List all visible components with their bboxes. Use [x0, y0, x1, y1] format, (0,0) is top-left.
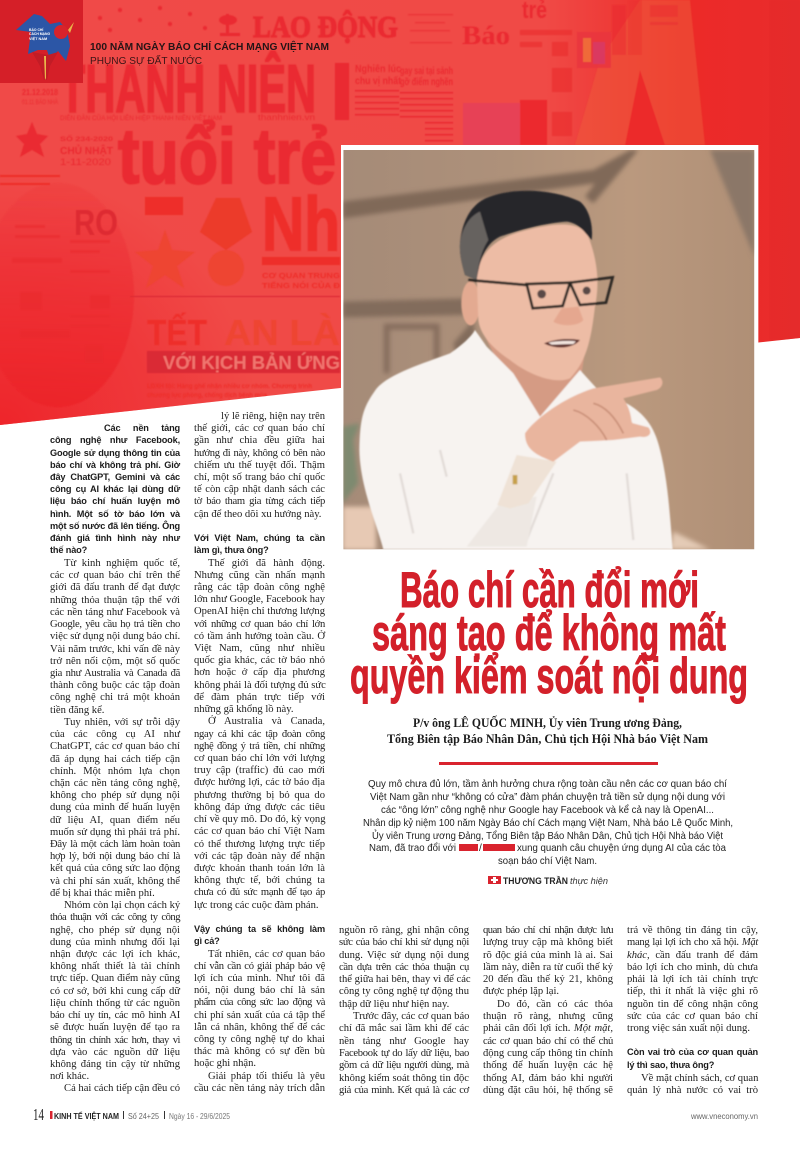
masthead fragments: LAO ĐỘNG: [253, 9, 398, 44]
text column 1: có cơ sở, bởi khi cung cấp dữ: [50, 986, 180, 997]
text column 2: Việt Nam, cũng như nhiều: [194, 643, 325, 654]
title: [350, 562, 748, 704]
text column 3: [339, 925, 471, 1096]
intro paragraph: soạn báo chí Việt Nam.: [498, 856, 597, 867]
masthead fragments: [16, 0, 678, 200]
text column 2: có tầm ảnh hưởng toàn cầu. Ở: [194, 631, 325, 642]
panel: red newspaper collage banner: LĐXH tội: Hàng ghế nhận nhiều cơ nhóm. Chương trình: [147, 383, 312, 390]
masthead fragments: DIỄN ĐÀN CỦA HỘI LIÊN HIỆP THANH NIÊN VIỆT NAM: [60, 113, 222, 122]
icon: 100 years press logo block: [0, 0, 83, 83]
text column 5: tiếp, thì ít nhất là việc ghi rõ: [627, 986, 758, 997]
text column 1: không cho phép sử dụng nội: [50, 790, 180, 801]
man: ear: [461, 281, 480, 325]
man: face: [477, 225, 597, 380]
text column 2: lợi ích của mình. Như tôi đã: [194, 973, 325, 984]
text column 1: không đáng tin cậy từ những: [50, 1059, 180, 1070]
masthead fragments: THANH NIÊN: [60, 50, 316, 127]
text column 2: Tất nhiên, các cơ quan báo: [208, 949, 325, 960]
text column 5: mang lại lợi ích cho xã hội. Mặt: [627, 937, 758, 948]
panel: red newspaper collage banner: Nh: [262, 182, 340, 267]
panel: red newspaper collage banner: RO: [74, 202, 118, 243]
panel: red newspaper collage banner: VỚI KỊCH BẢN ỨNG: [163, 352, 340, 373]
masthead fragments: Báo: [462, 21, 510, 50]
text column 3: Facebook tự do lấy dữ liệu, bao: [339, 1048, 469, 1059]
text column 4: lầm này, diễn ra từ cuối thế kỷ: [483, 962, 613, 973]
text column 4: [483, 925, 614, 1096]
text column 1: Từ kinh nghiệm quốc tế,: [64, 558, 180, 569]
text column 1: dung của mình nhưng đổi lại: [50, 937, 180, 948]
text column 3: dung. Việc sử dụng nội dung: [339, 950, 469, 961]
masthead fragments: gỡ điểm nghẽn: [400, 76, 453, 88]
masthead fragments: Nghiên lúc: [355, 64, 401, 75]
text column 2: lẫn cá nhân, không thể để các: [194, 1022, 325, 1033]
text column 2: OpenAI hiện chỉ thương lượng: [194, 606, 325, 617]
panel: red newspaper collage banner: TIẾNG NÓI CỦA Đ: [262, 280, 340, 290]
man: pointing hand: [525, 377, 662, 462]
header: section title: [90, 40, 329, 67]
text column 1: của các công cụ AI như: [50, 729, 180, 740]
text column 5: trả về thông tin đáng tin cậy,: [627, 925, 758, 936]
text column 2: nói, nội dung báo chí là sản: [194, 985, 325, 996]
text column 1: trở nên nổi cộm, một số quốc: [50, 656, 180, 667]
text column 1: sẽ được huấn luyện để tạo ra: [50, 1022, 180, 1033]
text column 1: báo chí uy tín, các mô hình AI: [50, 1010, 180, 1021]
masthead fragments: chu vị nhất: [355, 75, 402, 87]
intro paragraph: Nam, đã trao đổi với: [369, 842, 456, 854]
panel: red newspaper collage banner: TẾT: [147, 312, 207, 353]
text column 3: không kiểm soát thông tin độc: [339, 1073, 469, 1084]
masthead fragments: 21.12.2018: [22, 88, 58, 97]
opening question: đây ChatGPT, Gemini và các: [50, 472, 180, 482]
text column 1: Nhóm còn lại chọn cách ký: [64, 900, 180, 911]
text column 2: có thể thương lượng trực tiếp: [194, 839, 325, 850]
intro paragraph: Việt Nam gần như “không có cửa” đàm phán chuyện trả tiền sử dụng nội dung với: [370, 791, 725, 803]
byline: thực hiện: [570, 876, 608, 887]
text column 2: hướng đi này, không có bên nào: [194, 448, 325, 459]
red divider rule: [439, 762, 658, 765]
text column 2: chưa có đủ sức mạnh để tạo áp: [194, 887, 325, 898]
text column 2: nghệ đồng ý trả tiền, chỉ những: [194, 741, 325, 752]
opening question: Các nền tảng: [104, 423, 180, 433]
text column 2: không đáp ứng được các tiêu: [194, 802, 325, 813]
masthead fragments: CHỦ NHẬT: [60, 144, 113, 157]
opening question: liệu báo chí huấn luyện mô: [50, 496, 180, 506]
text column 2: công ty công nghệ tự do khai: [194, 1034, 325, 1045]
intro paragraph: [363, 778, 733, 867]
text column 4: quan báo chí chỉ nhận được lưu: [483, 925, 613, 936]
text column 3: chí đã mắc sai lầm khi để các: [339, 1023, 469, 1034]
man: glasses: [468, 277, 613, 308]
text column 2: với những cơ quan báo chí lớn: [194, 619, 325, 630]
icon: 100 years press logo block: VIỆT NAM: [29, 36, 47, 41]
question heading: [194, 924, 325, 946]
masthead fragments: SỐ 234-2020: [60, 136, 114, 143]
intro paragraph: Quy mô chưa đủ lớn, tầm ảnh hưởng chưa rộng toàn cầu nên các cơ quan báo chí: [368, 778, 727, 790]
text column 2: được khoản thanh toán lớn là: [194, 863, 325, 874]
text column 1: chặn các nền tảng công nghệ,: [50, 778, 180, 789]
text column 3: gồm cả dữ liệu người dùng, mà: [339, 1060, 469, 1071]
question heading: làm gì, thưa ông?: [194, 545, 269, 555]
text column 2: thế giới, các cơ quan báo chí: [194, 423, 325, 434]
text column 1: dữ liệu AI, quan điểm nếu: [50, 815, 180, 826]
text column 2: cận để theo dõi xu hướng này.: [194, 509, 321, 520]
text column 1: [50, 423, 180, 1094]
text column 5: khác, cần đấu tranh để đảm: [627, 950, 758, 961]
text column 4: 20 đến đầu thế kỷ 21, không: [483, 974, 613, 985]
text column 1: trực tiếp. Quan điểm này cũng: [50, 973, 180, 984]
text column 1: các cơ quan báo chí trên thế: [50, 570, 180, 581]
opening question: công cụ AI khác lại dùng dữ: [50, 484, 180, 494]
panel: red newspaper collage banner: CƠ QUAN TRUNG: [262, 273, 341, 280]
text column 2: Giải pháp tối thiểu là yêu: [208, 1071, 325, 1082]
opening question: [50, 423, 180, 555]
text column 2: lý lẽ riêng, hiện nay trên: [221, 411, 325, 422]
text column 1: liệu chính thống từ các nguồn: [50, 998, 180, 1009]
text column 1: và chi phí sản xuất, không thể: [50, 876, 180, 887]
intro paragraph: các “ông lớn” công nghệ như Google hay Facebook và kể cả nay là OpenAI...: [381, 804, 714, 816]
subtitle: interviewee credentials: [387, 715, 708, 746]
masthead fragments: 1-11-2020: [60, 157, 111, 168]
text column 1: tiền đăng kể.: [50, 705, 104, 716]
text column 2: cầu các nền tảng này trích dẫn: [194, 1083, 325, 1094]
opening question: công nghệ như Facebook,: [50, 435, 180, 445]
subtitle: interviewee credentials: P/v ông LÊ QUỐC MINH, Ủy viên Trung ương Đảng,: [413, 715, 682, 730]
text column 1: ChatGPT, các cơ quan báo chí: [50, 741, 180, 752]
wood beams: [343, 150, 754, 550]
text column 2: phẩm của công sức lao động và: [194, 997, 325, 1008]
text column 5: Về mặt chính sách, cơ quan: [641, 1073, 758, 1084]
text column 1: giới đã đấu tranh để đạt được: [50, 582, 180, 593]
text column 3: nền tảng như Google hay: [339, 1036, 469, 1047]
text column 1: không nhất thiết là tài chính: [50, 961, 180, 972]
text column 1: Đây là một cách làm hoàn toàn: [50, 839, 180, 850]
text column 5: trong việc sản xuất nội dung.: [627, 1023, 750, 1034]
text column 4: Do đó, cần có các thỏa: [497, 999, 613, 1010]
masthead fragments: gay sai tại sảnh: [400, 66, 453, 77]
text column 5: [627, 925, 758, 1096]
text column 1: Tuy nhiên, với sự trỗi dậy: [64, 717, 180, 728]
text column 1: gia như Australia và Canada đã: [50, 668, 180, 679]
text column 2: lực trong các cuộc đàm phán.: [194, 900, 319, 911]
text column 4: các cơ quan báo chí có thể chủ: [483, 1036, 613, 1047]
man: neck: [486, 340, 584, 416]
text column 1: việc sử dụng nội dung báo chí.: [50, 631, 180, 642]
text column 4: thống AI, đảm bảo khi người: [483, 1073, 613, 1084]
text column 2: Nhưng cũng cần nhấn mạnh: [194, 570, 325, 581]
man: shirt: [359, 330, 673, 549]
icon: 100 years press logo block: CÁCH MẠNG: [29, 31, 50, 36]
text column 2: tờ báo tham gia từng cách tiếp: [194, 496, 325, 507]
panel: red newspaper collage banner: AN LÀ: [224, 312, 340, 353]
text column 3: nguồn rõ ràng, ghi nhận công: [339, 925, 469, 936]
text column 2: không phải là đối tượng đủ sức: [194, 680, 326, 691]
icon: 100 years press logo block: BÁO CHÍ: [29, 27, 44, 32]
man: cuff: [497, 455, 557, 508]
text column 2: chí về quy mô. Do đó, kỳ vọng: [194, 814, 326, 825]
text column 1: nhận được các lợi ích khác,: [50, 949, 180, 960]
text column 2: quốc gia khác, các tờ báo nhỏ: [194, 655, 325, 666]
text column 2: thác mà không có sự đền bù: [194, 1046, 325, 1057]
text column 1: dung của mình để huấn luyện: [50, 802, 180, 813]
question heading: gì cả?: [194, 936, 220, 946]
text column 5: quản lý nhà nước có vai trò: [627, 1085, 758, 1096]
text column 3: cần dựa trên các thỏa thuận cụ: [339, 962, 469, 973]
text column 5: phải là lợi ích tài chính trực: [627, 974, 758, 985]
text column 1: chính. Một nhóm lựa chọn: [50, 766, 180, 777]
photo: interviewee portrait with white frame: [341, 145, 758, 550]
text column 3: công ty công nghệ tự động thu: [339, 986, 469, 997]
text column 1: hợp lý, bởi nội dung báo chí là: [50, 851, 180, 862]
text column 2: với các tập đoàn này để nhận: [194, 851, 325, 862]
text column 4: rõ độc giả của mình là ai. Sai: [483, 950, 613, 961]
header: section title: PHỤNG SỰ ĐẤT NƯỚC: [90, 54, 202, 67]
text column 2: Ở Australia và Canada,: [208, 716, 325, 727]
man: hair: [460, 191, 592, 280]
byline: [488, 876, 608, 887]
text column 2: cơ quan báo chí lớn với lượng: [194, 753, 325, 764]
text column 2: chi phí sản xuất của cả tập thể: [194, 1010, 325, 1021]
text column 2: hơn hoặc ở cấp địa phương: [194, 667, 325, 678]
text column 5: sức của các cơ quan báo chí: [627, 1011, 758, 1022]
question heading: lý thì sao, thưa ông?: [627, 1060, 714, 1070]
lower collage: [29, 210, 134, 407]
footer: page number and publication line: [33, 1105, 230, 1124]
text column 2: ngay cả khi các tập đoàn công: [194, 729, 325, 740]
opening question: báo chí và không trả phí. Giờ: [50, 460, 180, 470]
text column 2: chiếm ưu thế tuyệt đối. Thậm: [194, 460, 325, 471]
text column 3: giả của mình. Kết quả là các cơ: [339, 1085, 469, 1096]
text column 2: Thế giới đã hành động.: [208, 558, 325, 569]
masthead fragments: thanhnien.vn: [258, 113, 315, 122]
text column 1: Vài năm trước, khi vấn đề này: [50, 644, 180, 655]
masthead fragments: 01.11 BÁO NHÀ: [22, 99, 58, 106]
text column 1: nghệ, cho phép sử dụng nội: [50, 925, 180, 936]
footer: page number and publication line: Số 24+25: [128, 1111, 159, 1121]
text column 1: muốn sử dụng thì phải trả phí.: [50, 827, 180, 838]
text column 1: thông tin chính xác hơn, thay vì: [50, 1035, 180, 1046]
intro paragraph: xung quanh câu chuyện ứng dụng AI của các tòa: [517, 842, 726, 854]
text column 4: thuận rõ ràng, nhưng cũng: [483, 1011, 613, 1022]
text column 1: kết quả của công sức lao động: [50, 863, 180, 874]
text column 2: chí vẫn cần có giải pháp bảo vệ: [194, 961, 325, 972]
text column 2: truy cập (traffic) đủ cao mới: [194, 765, 325, 776]
opening question: một số nước đã lên tiếng. Ông: [50, 521, 180, 531]
text column 4: thống để huấn luyện các hệ: [483, 1060, 613, 1071]
footer: page number and publication line: KINH TẾ VIỆT NAM: [54, 1110, 119, 1121]
text column 2: gần như chia đều giữa hai: [194, 435, 325, 446]
opening question: thế nào?: [50, 545, 87, 555]
text column 2: rằng các tập đoàn công nghệ: [194, 582, 325, 593]
question heading: Với Việt Nam, chúng ta cần: [194, 533, 325, 543]
text column 2: chí, một số trang báo chí quốc: [194, 472, 325, 483]
text column 2: tế còn cập nhật danh sách các: [194, 484, 325, 495]
text column 1: nơi khác.: [50, 1071, 89, 1082]
text column 4: được phép lặp lại.: [483, 986, 559, 997]
text column 4: dùng đặt câu hỏi, hệ thống sẽ: [483, 1085, 613, 1096]
text column 2: phương thường bị bỏ qua do: [194, 790, 325, 801]
panel: red newspaper collage banner: chương lực phòng, chống dịch bệnh mùa: [147, 392, 268, 399]
intro paragraph: /: [479, 843, 482, 854]
text column 1: Google, yêu cầu họ trả tiền cho: [50, 619, 180, 630]
text column 2: [194, 411, 326, 1094]
masthead fragments: tuổi trẻ: [118, 112, 336, 200]
text column 1: thỏa thuận với các công ty công: [50, 912, 180, 923]
text column 2: hoặc ghi nhận.: [194, 1058, 256, 1069]
question heading: [194, 533, 325, 555]
text column 2: không thực tế, bởi chúng ta: [194, 875, 325, 886]
text column 1: để bị khai thác miễn phí.: [50, 888, 155, 899]
panel: red newspaper collage banner: [0, 0, 800, 425]
text column 1: Cả hai cách tiếp cận đều có: [64, 1083, 180, 1094]
text column 3: sức của báo chí khi sử dụng nội: [339, 937, 469, 948]
text column 1: các nền tảng như Facebook và: [50, 607, 180, 618]
text column 2: được hưởng lợi, các tờ báo địa: [194, 777, 325, 788]
question heading: Vậy chúng ta sẽ không làm: [194, 924, 325, 934]
text column 1: dựa vào các nguồn dữ liệu: [50, 1047, 180, 1058]
text column 3: thể giữa hai bên, thay vì để các: [339, 974, 471, 985]
text column 2: các cơ quan báo chí Việt Nam: [194, 826, 325, 837]
text column 3: Trước đây, các cơ quan báo: [353, 1011, 469, 1022]
text column 1: thành công buộc các tập đoàn: [50, 680, 180, 691]
text column 2: để đàm phán trực tiếp với: [194, 692, 325, 703]
text column 4: phải cân đối lợi ích. Một mặt,: [483, 1023, 613, 1034]
byline: THƯƠNG TRẦN: [503, 876, 568, 887]
text column 5: nguồn tin để công nhận công: [627, 999, 758, 1010]
text column 3: thập dữ liệu như hiện nay.: [339, 999, 449, 1010]
question heading: [627, 1047, 758, 1070]
question heading: Còn vai trò của cơ quan quản: [627, 1047, 758, 1057]
intro paragraph: Ủy viên Trung ương Đảng, Tổng Biên tập Báo Nhân Dân, Chủ tịch Hội Nhà báo Việt: [372, 829, 723, 842]
opening question: Google sử dụng thông tin của: [50, 448, 180, 458]
text column 4: lượng truy cập mà không biết: [483, 937, 613, 948]
opening question: đánh giá tình hình này như: [50, 533, 180, 543]
text column 1: công nghệ chi trả một khoản: [50, 692, 180, 703]
header: section title: 100 NĂM NGÀY BÁO CHÍ CÁCH MẠNG VIỆT NAM: [90, 40, 329, 53]
text column 1: những thỏa thuận tập thể với: [50, 595, 180, 606]
footer: page number and publication line: 14: [33, 1105, 44, 1124]
text column 2: lớn như Google, Facebook hay: [194, 594, 325, 605]
text column 2: những gã khổng lồ này.: [194, 704, 294, 715]
opening question: hình. Một số tờ báo lớn và: [50, 509, 180, 519]
text column 4: động cung cấp thông tin chính: [483, 1048, 613, 1059]
text column 5: bảo lợi ích cho mình, dù chưa: [627, 962, 758, 973]
text column 1: đã áp dụng hai cách tiếp cận: [50, 754, 180, 764]
